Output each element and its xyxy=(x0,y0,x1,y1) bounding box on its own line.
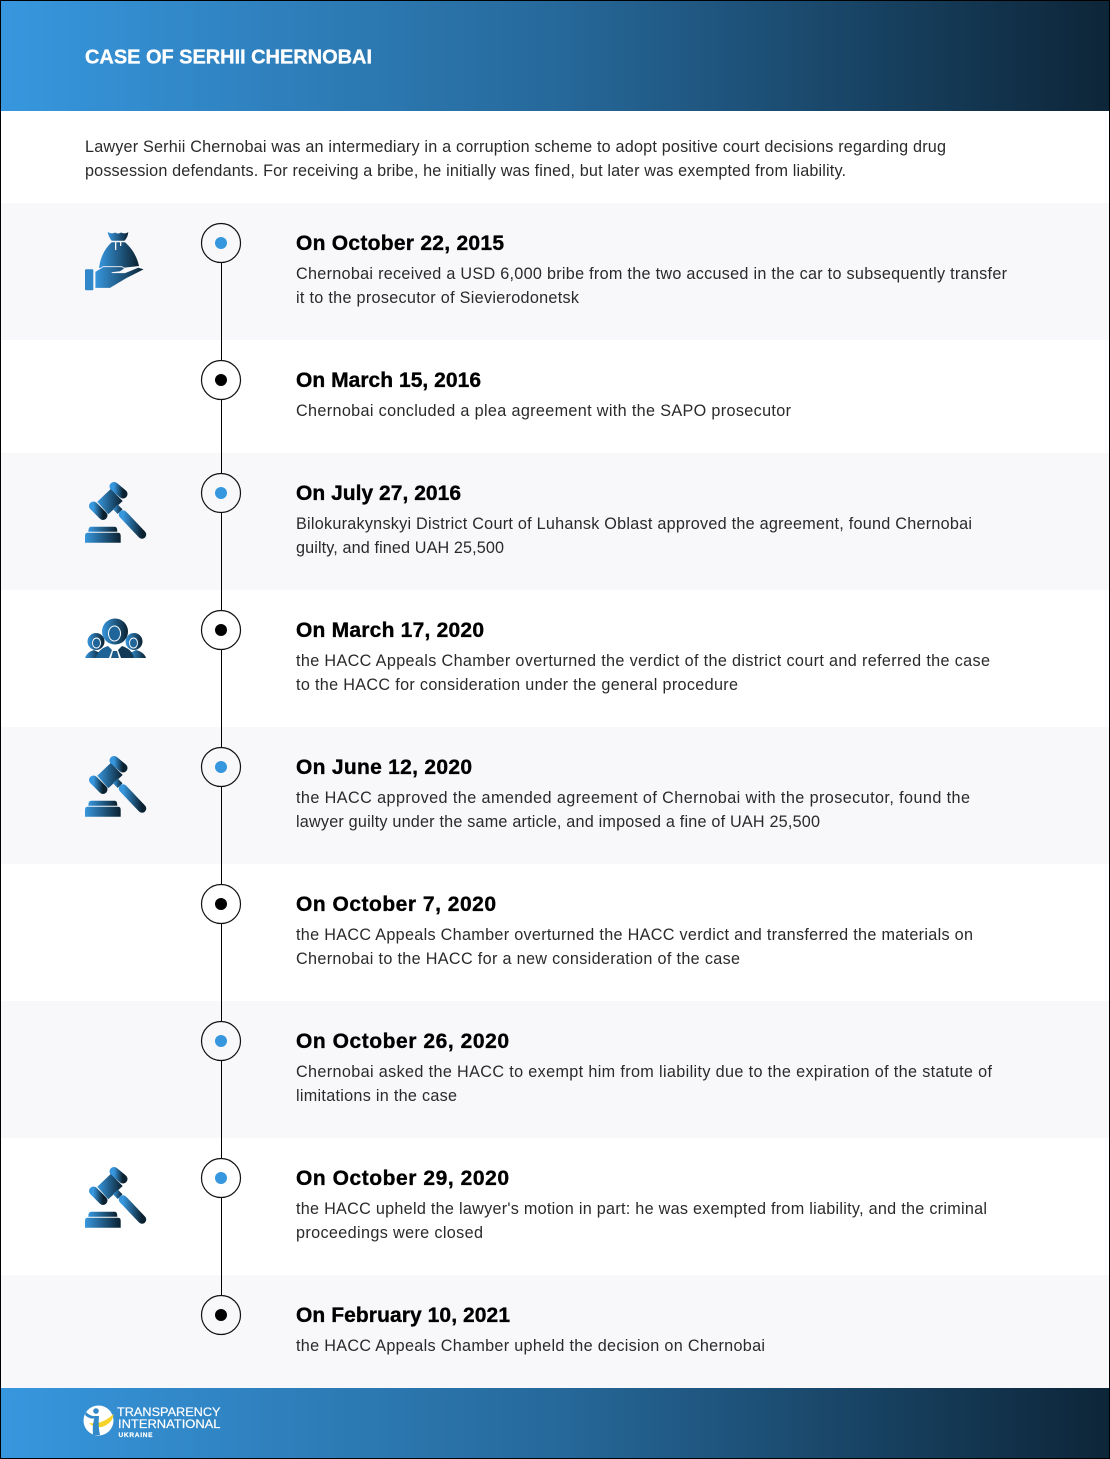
icon: gavel xyxy=(85,1172,142,1228)
marker xyxy=(202,1158,240,1198)
intro text: possession defendants. For receiving a bribe, he initially was fined, but later was exempted from liability. xyxy=(85,162,846,180)
marker xyxy=(202,610,240,650)
icon: gavel xyxy=(85,486,142,543)
description: Chernobai to the HACC for a new consideration of the case xyxy=(296,950,740,968)
intro text: Lawyer Serhii Chernobai was an intermediary in a corruption scheme to adopt positive court decisions regarding drug xyxy=(85,138,946,156)
date: On June 12, 2020 xyxy=(296,756,472,779)
description xyxy=(296,265,1008,307)
entry: October 22, 2015 xyxy=(85,224,1008,307)
marker xyxy=(202,884,240,924)
entry: October 29, 2020 xyxy=(85,1158,987,1242)
description: the HACC Appeals Chamber upheld the decision on Chernobai xyxy=(296,1337,765,1355)
description xyxy=(296,1200,987,1242)
description xyxy=(296,789,970,831)
logo wordmark xyxy=(117,1405,221,1439)
marker xyxy=(202,224,240,262)
title: CASE OF SERHII CHERNOBAI xyxy=(85,46,372,68)
entry: October 26, 2020 xyxy=(202,1022,992,1105)
date: On March 15, 2016 xyxy=(296,369,481,392)
description: Bilokurakynskyi District Court of Luhansk Oblast approved the agreement, found Chernobai xyxy=(296,515,972,533)
logo wordmark: TRANSPARENCY xyxy=(117,1405,220,1419)
marker xyxy=(202,748,240,786)
description: Chernobai asked the HACC to exempt him from liability due to the expiration of the statute of xyxy=(296,1063,992,1081)
description xyxy=(296,515,972,557)
description: the HACC Appeals Chamber overturned the verdict of the district court and referred the case xyxy=(296,652,990,670)
header band xyxy=(1,1,1109,111)
marker xyxy=(202,1296,240,1334)
description: Chernobai concluded a plea agreement with the SAPO prosecutor xyxy=(296,402,792,420)
footer band xyxy=(1,1388,1109,1458)
description: the HACC approved the amended agreement of Chernobai with the prosecutor, found the xyxy=(296,789,970,807)
date: On October 7, 2020 xyxy=(296,893,496,916)
date: On July 27, 2016 xyxy=(296,482,461,505)
description: the HACC Appeals Chamber overturned the HACC verdict and transferred the materials on xyxy=(296,926,973,944)
entry: February 10, 2021 xyxy=(202,1296,765,1355)
description: proceedings were closed xyxy=(296,1224,483,1242)
marker xyxy=(202,474,240,512)
logo wordmark: INTERNATIONAL xyxy=(118,1417,221,1431)
description: the HACC upheld the lawyer's motion in part: he was exempted from liability, and the criminal xyxy=(296,1200,987,1218)
date: On October 26, 2020 xyxy=(296,1030,509,1053)
icon: gavel xyxy=(85,760,142,817)
entry: March 17, 2020 xyxy=(85,610,990,694)
entry: March 15, 2016 xyxy=(202,360,792,420)
description: guilty, and fined UAH 25,500 xyxy=(296,539,504,557)
marker xyxy=(202,360,240,400)
logo wordmark: UKRAINE xyxy=(118,1432,153,1439)
description: limitations in the case xyxy=(296,1087,457,1105)
timeline line xyxy=(221,243,222,1315)
entry: June 12, 2020 xyxy=(85,748,970,831)
intro text xyxy=(85,138,946,180)
description: lawyer guilty under the same article, and imposed a fine of UAH 25,500 xyxy=(296,813,820,831)
date: On October 22, 2015 xyxy=(296,232,504,255)
logo xyxy=(84,1405,221,1439)
icon: money bag in hand xyxy=(85,232,144,290)
date: On February 10, 2021 xyxy=(296,1304,510,1327)
description: to the HACC for consideration under the general procedure xyxy=(296,676,738,694)
description: Chernobai received a USD 6,000 bribe from the two accused in the car to subsequently transfer xyxy=(296,265,1008,283)
description xyxy=(296,652,990,694)
date: On October 29, 2020 xyxy=(296,1167,509,1190)
description xyxy=(296,1063,992,1105)
description xyxy=(296,926,973,968)
icon: group of people xyxy=(85,618,146,658)
icon: logo globe xyxy=(84,1406,114,1436)
entry: July 27, 2016 xyxy=(85,474,972,557)
description: it to the prosecutor of Sievierodonetsk xyxy=(296,289,580,307)
date: On March 17, 2020 xyxy=(296,619,484,642)
entry: October 7, 2020 xyxy=(202,884,973,968)
marker xyxy=(202,1022,240,1060)
